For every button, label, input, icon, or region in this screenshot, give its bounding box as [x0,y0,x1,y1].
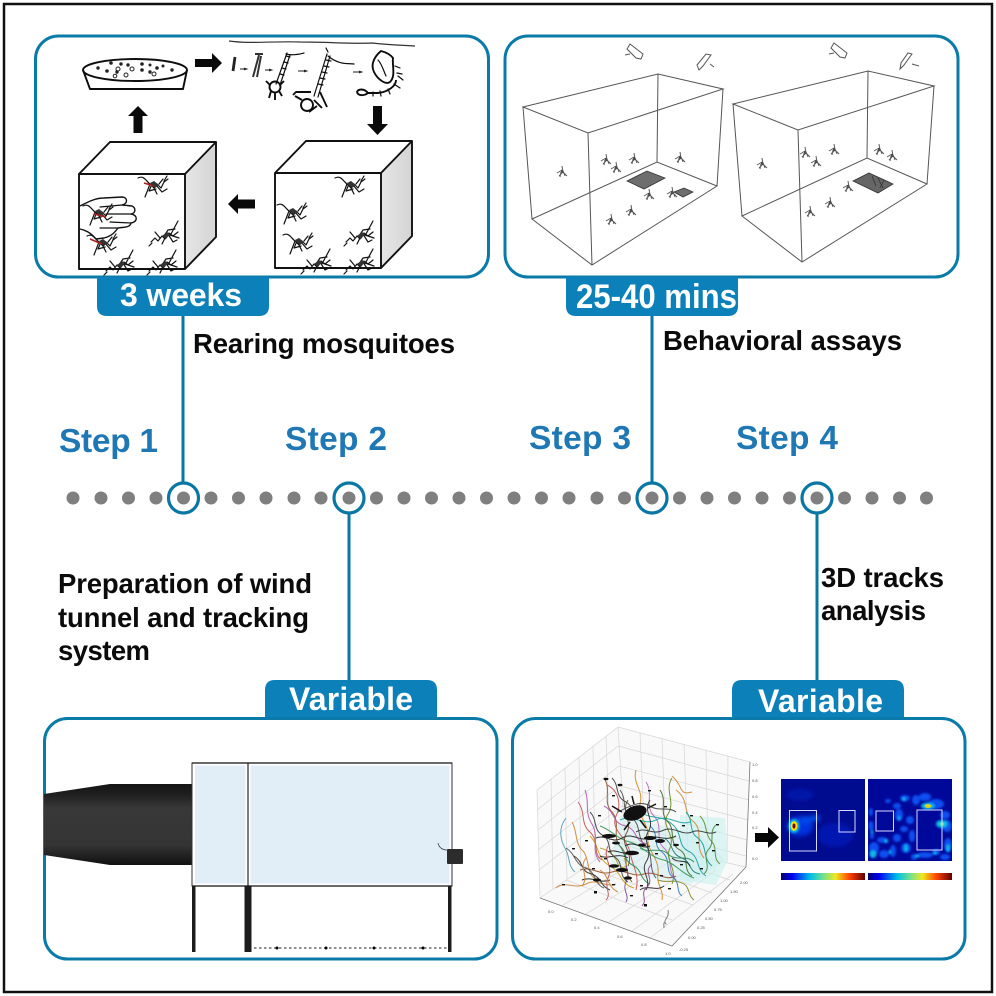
icon: tunnel legs [192,886,452,952]
tab: variable step 4: Variable [758,683,883,719]
chart walls and grid [537,727,750,946]
chart axis labels: 0.50 [705,916,714,921]
panel: behavioral assays [505,36,958,277]
arrow: cage to dish [128,106,148,133]
icon: odor source [438,843,463,864]
panel: wind tunnel [44,718,497,959]
connector: step 3 [650,314,654,483]
chart axis labels: 0.8 [752,778,758,783]
chart track lines [556,770,720,928]
heading: step 2: Step 2 [285,421,387,458]
chart axis labels: 0.6 [617,934,623,939]
panel: 3D tracks analysis [512,718,965,959]
chart axis labels: 0.2 [752,825,758,830]
chart axis labels: 0.75 [714,907,723,912]
chart axis labels: 0.0 [548,909,554,914]
timeline marker: step 2 [334,483,364,513]
heading: step 4: Step 4 [736,420,838,457]
icon: floor marker line [254,946,447,950]
tab: variable step 4 [732,680,904,719]
chart axis labels: 2.00 [740,880,749,885]
icon: hand [80,197,136,239]
timeline marker: step 4 [802,483,832,513]
label: preparation of wind tunnel: Preparation of wind [58,568,312,599]
timeline dots [66,492,933,504]
chart axis labels: 0.2 [571,917,577,922]
chart axis labels [548,762,758,956]
connector: step 2 [348,513,350,682]
chart axis labels: 1.00 [720,898,729,903]
chart: heatmap left [781,779,865,861]
heading: step 3: Step 3 [529,420,631,457]
label: rearing mosquitoes: Rearing mosquitoes [193,328,455,359]
chart dense track cluster [562,778,719,906]
chart axis labels: 0.0 [752,856,758,861]
icon: left wind tunnel box [523,74,723,265]
icon: water surface line [229,41,415,46]
icon: right wind tunnel box [733,71,934,262]
connector: step 4 [816,513,818,682]
chart axis labels: 0.8 [641,942,647,947]
chart axis labels: 1.0 [752,762,758,767]
heading: step 1: Step 1 [59,423,158,460]
icon: wind tunnel inlet tube [44,784,192,865]
arrow: cage to cage with blood meal [228,194,255,214]
tab: variable step 2: Variable [289,681,413,717]
chart axis labels: 0.00 [688,935,697,940]
tab: 3 weeks [97,277,269,316]
chart axis labels: 0.4 [752,810,758,815]
panel: rearing mosquitoes [36,36,488,277]
label: preparation of wind tunnel: tunnel and tracking [58,602,309,633]
chart axis labels: -0.25 [679,947,689,952]
icon: larval stages [233,48,403,112]
legend: colour bar right [868,873,952,880]
label: behavioral assays: Behavioral assays [663,325,902,356]
arrow: dish to larvae [195,53,222,73]
chart axis labels: 1.50 [730,889,739,894]
chart: heatmap right [868,779,952,861]
legend: colour bar left [781,873,865,880]
icon: tunnel chamber [192,763,452,886]
label: 3D tracks analysis [821,562,944,626]
tab: 25-40 mins: 25-40 mins [576,278,737,316]
label: preparation of wind tunnel: system [58,635,150,666]
arrow: tracks to heatmaps [755,827,779,848]
arrow: larvae to cage [367,106,388,135]
tab: variable step 2 [265,680,437,718]
tab: 3 weeks: 3 weeks [120,277,242,313]
timeline marker: step 1 [168,483,198,513]
icon: egg dish [83,59,187,89]
chart axis labels: 0.4 [594,925,600,930]
label: 3D tracks analysis: 3D tracks [821,562,944,593]
chart axis labels: 0.6 [752,794,758,799]
icon: right cage [275,141,412,274]
chart: 3D trajectories [537,727,758,956]
icon: left cage with hand [79,142,216,275]
label: 3D tracks analysis: analysis [821,595,926,626]
connector: step 1 [182,314,184,483]
chart axis labels: 0.25 [697,925,706,930]
label: preparation of wind tunnel [58,568,312,666]
icon: cameras [625,43,919,70]
chart axis labels: 1.0 [665,951,671,956]
timeline marker: step 3 [637,483,667,513]
